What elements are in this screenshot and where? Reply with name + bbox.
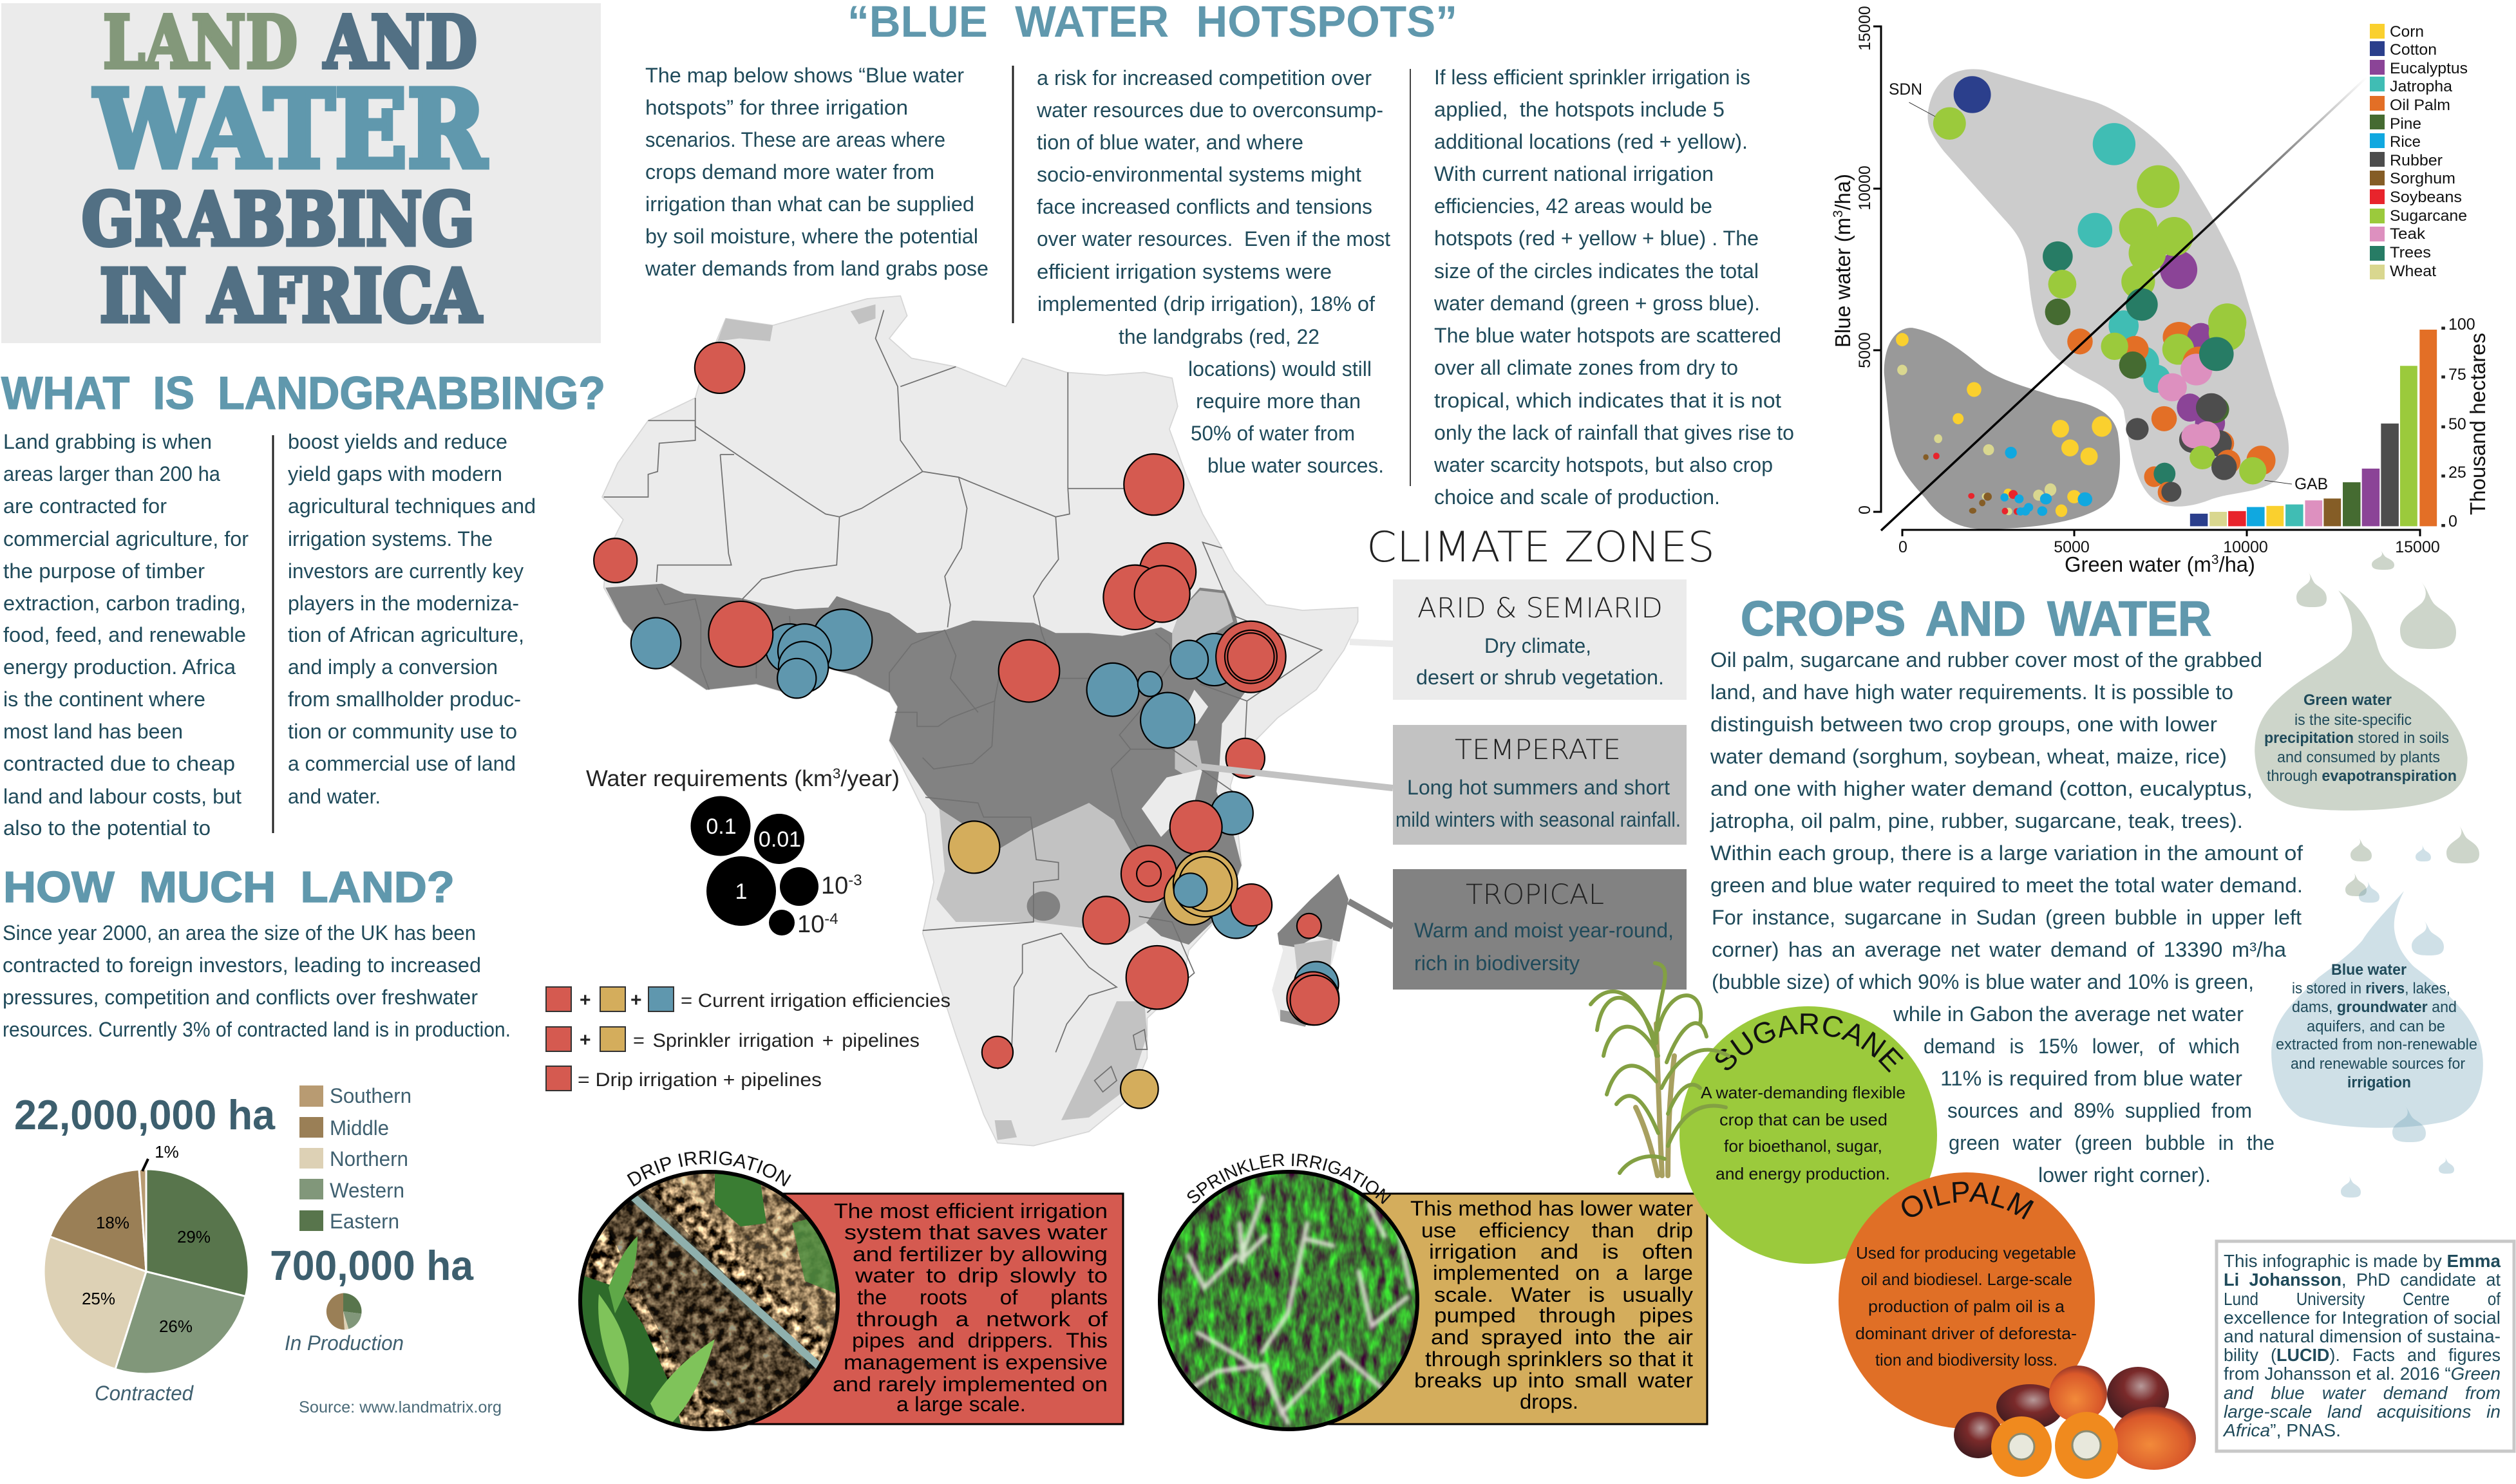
text block: hotspots column 2: tion of blue water, and where: [1037, 131, 1303, 154]
text block: hotspots column 2: over water resources. Even if the most: [1037, 227, 1390, 250]
description: and sprayed into the air: [1431, 1326, 1693, 1349]
text block: what is landgrabbing column 1: land and labour costs, but: [3, 785, 241, 808]
text block: what is landgrabbing column 1: commercial agriculture, for: [3, 527, 249, 550]
chart: green and blue water scatter: /ha): [2218, 552, 2255, 576]
chart: green and blue water scatter: 3: [2211, 552, 2218, 567]
text block: hotspots column 2: socio-environmental systems might: [1037, 163, 1361, 186]
bubble: oil palm: oil and biodiesel. Large-scale: [1861, 1270, 2072, 1289]
text block: how much land: resources. Currently 3% of contracted land is in production.: [3, 1018, 511, 1041]
legend: african regions: Middle: [330, 1116, 389, 1140]
chart: green and blue water scatter: GAB: [2294, 475, 2328, 493]
panel: credits: excellence for Integration of social: [2224, 1308, 2501, 1328]
chart: green and blue water scatter: 15000: [2395, 538, 2440, 556]
curved label: SPRINKLER IRRIGATION: [1187, 1154, 1391, 1204]
text block: what is landgrabbing column 1: the purpose of timber: [3, 559, 205, 583]
legend: crops: Oil Palm: [2390, 97, 2450, 114]
chart: green and blue water scatter: 10000: [1856, 165, 1874, 211]
panel: credits: large-scale land acquisitions in: [2224, 1402, 2501, 1422]
land: madagascar: [1272, 874, 1348, 1027]
text block: how much land: Since year 2000, an area the size of the UK has been: [3, 921, 476, 944]
text block: hotspots column 3: water scarcity hotspots, but also crop: [1433, 453, 1773, 476]
text block: crops and water: For instance, sugarcane in Sudan (green bubble in upper left: [1712, 906, 2302, 929]
callout: blue water drop: [2271, 891, 2483, 1128]
text block: crops and water: green water (green bubble in the: [1949, 1131, 2275, 1154]
text block: crops and water: water demand (sorghum, soybean, wheat, maize, rice): [1710, 745, 2227, 768]
description: irrigation and is often: [1429, 1240, 1693, 1263]
panel: credits: from Johansson et al. 2016 “Green: [2224, 1364, 2501, 1384]
text block: hotspots column 3: additional locations (red + yellow).: [1434, 130, 1748, 153]
icon: sugarcane plant: [1591, 963, 1728, 1176]
chart: green and blue water scatter: 0: [1898, 538, 1907, 556]
text block: crops and water: Oil palm, sugarcane and rubber cover most of the grabbed: [1710, 648, 2262, 672]
description: management is expensive: [844, 1351, 1108, 1374]
chart: green and blue water scatter: 5000: [2054, 538, 2090, 556]
text block: what is landgrabbing column 2: irrigation systems. The: [288, 527, 493, 550]
land: arid and semiarid: [602, 296, 1358, 1146]
text block: what is landgrabbing column 1: [3, 430, 249, 840]
legend: crops: Wheat: [2390, 263, 2436, 280]
pie chart: contracted land: 26%: [159, 1317, 193, 1336]
description: through sprinklers so that it: [1425, 1348, 1693, 1371]
legend: crops: Corn: [2390, 23, 2424, 41]
description: [1410, 1197, 1693, 1413]
legend: crops: Rubber: [2390, 152, 2443, 169]
description: the roots of plants: [857, 1286, 1108, 1309]
callout: green water drop: [2255, 590, 2468, 811]
chart: green and blue water scatter: /ha): [1831, 174, 1855, 210]
pie chart: contracted land: 18%: [96, 1213, 129, 1232]
text block: hotspots column 2: blue water sources.: [1207, 454, 1384, 477]
bar chart: thousand hectares by crop: 50: [2448, 415, 2466, 433]
text block: hotspots column 2: require more than: [1196, 390, 1361, 413]
legend: crops: Teak: [2390, 225, 2426, 243]
title panel: [1, 1, 601, 343]
legend: crops: Eucalyptus: [2390, 60, 2468, 77]
legend: african regions: Southern: [330, 1084, 411, 1107]
text: green water definition: and consumed by plants: [2277, 749, 2440, 766]
legend: african regions: Western: [330, 1179, 404, 1202]
chart: green and blue water scatter: Green water (m: [2065, 552, 2212, 576]
title: grabbing: GRABBING: [82, 178, 475, 262]
text block: crops and water: land, and have high water requirements. It is possible to: [1710, 681, 2233, 704]
stat: contracted hectares: 22,000,000 ha: [14, 1091, 276, 1138]
description: scale. Water is usually: [1434, 1283, 1693, 1306]
legend: african regions: Eastern: [330, 1210, 399, 1233]
chart: green and blue water scatter: 3: [1831, 210, 1846, 218]
text block: hotspots column 2: implemented (drip irrigation), 18% of: [1037, 292, 1375, 315]
panel: credits: Li Johansson, PhD candidate at: [2224, 1270, 2501, 1290]
text block: what is landgrabbing column 2: a commercial use of land: [288, 752, 516, 775]
description: use efficiency than drip: [1421, 1219, 1693, 1242]
text block: hotspots column 1: irrigation than what can be supplied: [645, 193, 974, 216]
text block: how much land: pressures, competition and conflicts over freshwater: [3, 986, 478, 1009]
panel: credits: and blue water demand from: [2224, 1383, 2501, 1403]
bar chart: thousand hectares by crop: [2190, 315, 2490, 531]
bubble: oil palm: Used for producing vegetable: [1856, 1243, 2076, 1263]
panel: tropical: rich in biodiversity: [1414, 952, 1580, 975]
text block: crops and water: distinguish between two crop groups, one with lower: [1710, 713, 2217, 736]
text block: what is landgrabbing column 2: yield gaps with modern: [288, 462, 502, 485]
legend: water requirements: 3: [833, 765, 840, 782]
bar chart: thousand hectares by crop: 25: [2448, 464, 2466, 482]
text block: what is landgrabbing column 2: [288, 430, 536, 808]
description: breaks up into small water: [1414, 1369, 1693, 1392]
legend: water requirements: [586, 765, 900, 938]
text block: what is landgrabbing column 1: contracted due to cheap: [3, 752, 235, 775]
text block: hotspots column 2: 50% of water from: [1191, 422, 1355, 445]
description: pumped through pipes: [1434, 1304, 1693, 1327]
text block: what is landgrabbing column 2: and water.: [288, 785, 381, 808]
panel: tropical: [1393, 869, 1687, 990]
text block: how much land: contracted to foreign investors, leading to increased: [3, 953, 481, 977]
text: blue water definition: [2276, 961, 2477, 1091]
text block: crops and water: corner) has an average net water demand of 13390 m³/ha: [1712, 938, 2286, 961]
legend: crops: Jatropha: [2390, 78, 2453, 95]
pie chart: contracted land: Contracted: [95, 1382, 194, 1405]
text block: hotspots column 2: face increased conflicts and tensions: [1037, 195, 1372, 218]
land: tropical zone: [605, 584, 1247, 944]
text block: crops and water: 11% is required from blue water: [1940, 1067, 2242, 1090]
legend: water requirements: Water requirements (km: [586, 766, 827, 791]
bar chart: thousand hectares by crop: Thousand hectares: [2466, 333, 2490, 515]
country borders: [604, 310, 1322, 1092]
text block: what is landgrabbing column 2: tion of African agriculture,: [288, 623, 524, 646]
legend: water requirements: /year): [840, 766, 900, 791]
text: blue water definition: dams, groundwater and: [2292, 999, 2457, 1016]
text block: hotspots column 3: tropical, which indicates that it is not: [1434, 389, 1781, 412]
text block: hotspots column 3: efficiencies, 42 areas would be: [1434, 194, 1712, 218]
title: land and: [103, 1, 477, 85]
text block: crops and water: lower right corner).: [2038, 1163, 2211, 1187]
bubble: sugarcane: for bioethanol, sugar,: [1724, 1136, 1882, 1156]
text block: hotspots column 1: scenarios. These are areas where: [645, 128, 945, 151]
bubble: oil palm: tion and biodiversity loss.: [1875, 1350, 2057, 1369]
description: and rarely implemented on: [833, 1373, 1108, 1396]
text block: crops and water: Within each group, there is a large variation in the amount of: [1710, 841, 2303, 865]
chart: green and blue water scatter: 10000: [2223, 538, 2268, 556]
panel: arid and semiarid: desert or shrub vegetation.: [1416, 666, 1664, 689]
panel: arid and semiarid: Dry climate,: [1484, 634, 1591, 657]
text block: crops and water: while in Gabon the average net water: [1893, 1002, 2244, 1026]
bar chart: thousand hectares by crop: 100: [2448, 315, 2475, 333]
hotspots: yellow: [949, 821, 1238, 1109]
text: blue water definition: aquifers, and can be: [2307, 1018, 2445, 1035]
text block: hotspots column 3: applied, the hotspots include 5: [1434, 98, 1725, 121]
text block: hotspots column 1: hotspots” for three irrigation: [645, 96, 908, 119]
panel: arid and semiarid: [1393, 579, 1687, 700]
chart: green and blue water scatter: [1831, 6, 2440, 576]
panel: credits: [2217, 1241, 2514, 1451]
text block: hotspots column 3: The blue water hotspots are scattered: [1434, 324, 1781, 347]
text block: hotspots column 2: the landgrabs (red, 22: [1119, 325, 1319, 348]
legend: irrigation scenarios: +: [580, 1029, 591, 1051]
text block: crops and water: sources and 89% supplied from: [1947, 1099, 2252, 1122]
text block: what is landgrabbing column 1: energy production. Africa: [3, 655, 236, 679]
text block: hotspots column 3: only the lack of rainfall that gives rise to: [1434, 421, 1794, 444]
water drop decorations: [2296, 550, 2479, 896]
pie chart: in production: In Production: [285, 1331, 404, 1355]
hotspots: blue: [631, 609, 1338, 1007]
legend: water requirements: 1: [735, 879, 747, 904]
text block: what is landgrabbing column 1: extraction, carbon trading,: [3, 592, 246, 615]
text: blue water definition: irrigation: [2347, 1074, 2411, 1091]
text block: what is landgrabbing column 1: also to the potential to: [3, 816, 211, 840]
text: blue water definition: and renewable sources for: [2291, 1055, 2465, 1073]
description: a large scale.: [896, 1393, 1026, 1416]
land: temperate zones: [936, 590, 1233, 1120]
text block: crops and water: green and blue water required to meet the total water demand.: [1710, 874, 2303, 897]
text block: hotspots column 3: [1433, 66, 1794, 509]
bubble: sugarcane: A water-demanding flexible: [1701, 1083, 1906, 1102]
curved label: DRIP IRRIGATION: [627, 1151, 791, 1187]
text block: hotspots column 1: water demands from land grabs pose: [645, 257, 988, 280]
legend: crops: Sorghum: [2390, 170, 2455, 187]
panel: sprinkler irrigation: [1158, 1154, 1708, 1431]
text block: what is landgrabbing column 1: food, feed, and renewable: [3, 623, 246, 646]
text: green water definition: is the site-specific: [2294, 711, 2412, 729]
text block: hotspots column 2: water resources due to overconsump-: [1036, 99, 1383, 122]
legend: crops: Trees: [2390, 244, 2431, 261]
bubble: sugarcane: crop that can be used: [1719, 1110, 1887, 1129]
panel: drip irrigation: [578, 1151, 1124, 1431]
text: blue water definition: is stored in rivers, lakes,: [2292, 980, 2450, 997]
panel: credits: and natural dimension of sustaina-: [2224, 1326, 2501, 1346]
title: land and: LAND: [103, 1, 298, 85]
chart: green and blue water scatter: SDN: [1889, 80, 1922, 99]
text block: what is landgrabbing column 2: agricultural techniques and: [288, 494, 536, 518]
bubble: oil palm: OILPALM: [1902, 1182, 2034, 1219]
text block: crops and water: jatropha, oil palm, pine, rubber, sugarcane, teak, trees).: [1710, 809, 2243, 832]
text block: hotspots column 1: The map below shows “Blue water: [645, 64, 964, 87]
stat: in production hectares: 700,000 ha: [270, 1242, 474, 1289]
legend: crops: Sugarcane: [2390, 207, 2467, 225]
chart: green and blue water scatter: 15000: [1856, 6, 1874, 51]
text block: hotspots column 3: water demand (green + gross blue).: [1433, 292, 1760, 315]
description: implemented on a large: [1433, 1261, 1693, 1284]
heading: climate zones: CLIMATE ZONES: [1367, 523, 1715, 572]
text block: what is landgrabbing column 1: areas larger than 200 ha: [3, 462, 220, 485]
axes: [1873, 26, 2420, 536]
legend: irrigation scenarios: = Drip irrigation + pipelines: [578, 1069, 822, 1091]
description: water to drip slowly to: [855, 1264, 1108, 1287]
text block: what is landgrabbing column 2: from smallholder produc-: [288, 688, 521, 711]
text block: crops and water: [1710, 648, 2303, 1187]
photo: sprinkler field: [1160, 1172, 1417, 1429]
text block: hotspots column 1: by soil moisture, where the potential: [645, 225, 978, 248]
panel: tropical: TROPICAL: [1466, 879, 1604, 911]
panel: credits: This infographic is made by Emma: [2224, 1251, 2501, 1271]
legend: irrigation scenarios: +: [630, 990, 642, 1011]
text block: what is landgrabbing column 2: players in the moderniza-: [288, 592, 519, 615]
land: north coast temperate patches: [717, 305, 1017, 1140]
text: green water definition: through evapotranspiration: [2267, 767, 2457, 785]
heading: how much land: HOW MUCH LAND?: [3, 863, 455, 912]
text block: what is landgrabbing column 1: Land grabbing is when: [3, 430, 212, 453]
chart: green and blue water scatter: 0: [1856, 505, 1874, 514]
text block: what is landgrabbing column 2: investors are currently key: [288, 559, 524, 583]
pie chart: contracted land: 25%: [82, 1289, 115, 1308]
legend: african regions: Northern: [330, 1147, 408, 1170]
panel: temperate: [1393, 725, 1687, 845]
text block: how much land: [3, 921, 511, 1041]
bubble: sugarcane: and energy production.: [1716, 1164, 1890, 1183]
bar chart: thousand hectares by crop: 75: [2448, 366, 2466, 384]
panel: tropical: Warm and moist year-round,: [1414, 919, 1674, 942]
pie chart: contracted land: 1%: [155, 1142, 179, 1161]
icon: palm fruits: [1954, 1366, 2196, 1479]
pie chart: in production: [285, 1293, 404, 1355]
text: blue water definition: Blue water: [2331, 961, 2407, 979]
legend: crops: Pine: [2390, 115, 2421, 133]
panel: credits: Africa”, PNAS.: [2222, 1420, 2341, 1440]
text block: hotspots column 2: [1036, 66, 1390, 477]
source note: Source: www.landmatrix.org: [299, 1398, 502, 1416]
text block: hotspots column 3: choice and scale of production.: [1434, 485, 1720, 509]
bubble: oil palm: dominant driver of deforesta-: [1855, 1324, 2077, 1343]
text block: hotspots column 3: hotspots (red + yellow + blue) . The: [1434, 227, 1759, 250]
description: drops.: [1520, 1390, 1578, 1413]
text block: hotspots column 3: With current national irrigation: [1434, 162, 1714, 185]
text block: what is landgrabbing column 1: are contracted for: [3, 494, 167, 518]
bubble: sugarcane: SUGARCANE: [1716, 1013, 1904, 1073]
legend: irrigation scenarios: [546, 987, 951, 1091]
legend: crops: Cotton: [2390, 41, 2437, 59]
text block: hotspots column 2: a risk for increased competition over: [1037, 66, 1372, 89]
legend: water requirements: 10: [797, 911, 824, 938]
map of africa with hotspots: [594, 296, 1358, 1146]
text block: what is landgrabbing column 1: most land has been: [3, 720, 183, 743]
bar chart: thousand hectares by crop: 0: [2448, 512, 2457, 531]
bubble: oil palm: [1839, 1172, 2095, 1428]
text: green water definition: precipitation stored in soils: [2264, 729, 2449, 747]
text block: hotspots column 3: size of the circles indicates the total: [1434, 259, 1759, 283]
description: [833, 1199, 1108, 1416]
text block: crops and water: (bubble size) of which 90% is blue water and 10% is green,: [1712, 970, 2254, 993]
description: This method has lower water: [1410, 1197, 1693, 1220]
legend: irrigation scenarios: +: [580, 990, 591, 1011]
legend: irrigation scenarios: = Current irrigation efficiencies: [681, 990, 951, 1011]
text block: hotspots column 1: crops demand more water from: [645, 160, 934, 183]
legend: african regions: [299, 1084, 411, 1233]
chart: green and blue water scatter: Blue water (m: [1831, 216, 1855, 348]
panel: temperate: mild winters with seasonal rainfall.: [1395, 808, 1681, 831]
scatter regions and bubbles: [1884, 69, 2292, 529]
text block: what is landgrabbing column 2: boost yields and reduce: [288, 430, 507, 453]
legend: water requirements: 0.01: [759, 827, 801, 852]
description: system that saves water: [844, 1221, 1108, 1244]
text: blue water definition: extracted from non-renewable: [2276, 1036, 2477, 1053]
title: land and: AND: [323, 1, 477, 85]
text block: what is landgrabbing column 2: and imply a conversion: [288, 655, 498, 679]
legend: water requirements: 0.1: [706, 814, 737, 839]
legend: crops: [2370, 23, 2468, 280]
title: in africa: IN AFRICA: [100, 254, 482, 339]
callout lines: [1197, 642, 1393, 926]
text block: what is landgrabbing column 2: tion or community use to: [288, 720, 517, 743]
description: through a network of: [856, 1308, 1108, 1331]
text: green water definition: Green water: [2303, 691, 2392, 709]
hotspots: red: [594, 343, 1339, 1068]
text block: hotspots column 3: over all climate zones from dry to: [1434, 356, 1738, 379]
text block: hotspots column 1: [645, 64, 988, 280]
text block: crops and water: and one with higher water demand (cotton, eucalyptus,: [1710, 777, 2253, 800]
heading: crops and water: CROPS AND WATER: [1741, 592, 2211, 646]
pie chart: contracted land: [44, 1142, 249, 1405]
legend: water requirements: 10: [821, 872, 848, 899]
photo: drip irrigation: [580, 1172, 838, 1430]
bubble: sugarcane: [1679, 1006, 1937, 1264]
legend: water requirements: -3: [848, 872, 862, 889]
description: pipes and drippers. This: [852, 1329, 1108, 1352]
legend: crops: Rice: [2390, 133, 2421, 151]
text block: what is landgrabbing column 1: is the continent where: [3, 688, 205, 711]
panel: temperate: Long hot summers and short: [1407, 776, 1670, 799]
chart: green and blue water scatter: 5000: [1856, 332, 1874, 368]
legend: water requirements: -4: [824, 910, 838, 928]
panel: temperate: TEMPERATE: [1455, 734, 1621, 766]
text block: hotspots column 2: locations) would still: [1188, 357, 1372, 380]
legend: irrigation scenarios: = Sprinkler irrigation + pipelines: [633, 1030, 920, 1051]
panel: credits: bility (LUCID). Facts and figures: [2224, 1345, 2501, 1365]
description: The most efficient irrigation: [834, 1199, 1108, 1223]
legend: crops: Soybeans: [2390, 189, 2462, 206]
bubble: oil palm: production of palm oil is a: [1868, 1297, 2065, 1316]
text block: hotspots column 2: efficient irrigation systems were: [1037, 260, 1332, 283]
pie chart: contracted land: 29%: [177, 1227, 211, 1246]
panel: arid and semiarid: ARID & SEMIARID: [1417, 592, 1663, 625]
text: green water definition: [2264, 691, 2457, 785]
text block: hotspots column 3: If less efficient sprinkler irrigation is: [1434, 66, 1750, 89]
description: and fertilizer by allowing: [853, 1243, 1108, 1266]
title: water: WATER: [93, 67, 487, 193]
heading: what is landgrabbing: WHAT IS LANDGRABBING?: [1, 368, 605, 419]
text block: crops and water: demand is 15% lower, of which: [1924, 1035, 2240, 1058]
